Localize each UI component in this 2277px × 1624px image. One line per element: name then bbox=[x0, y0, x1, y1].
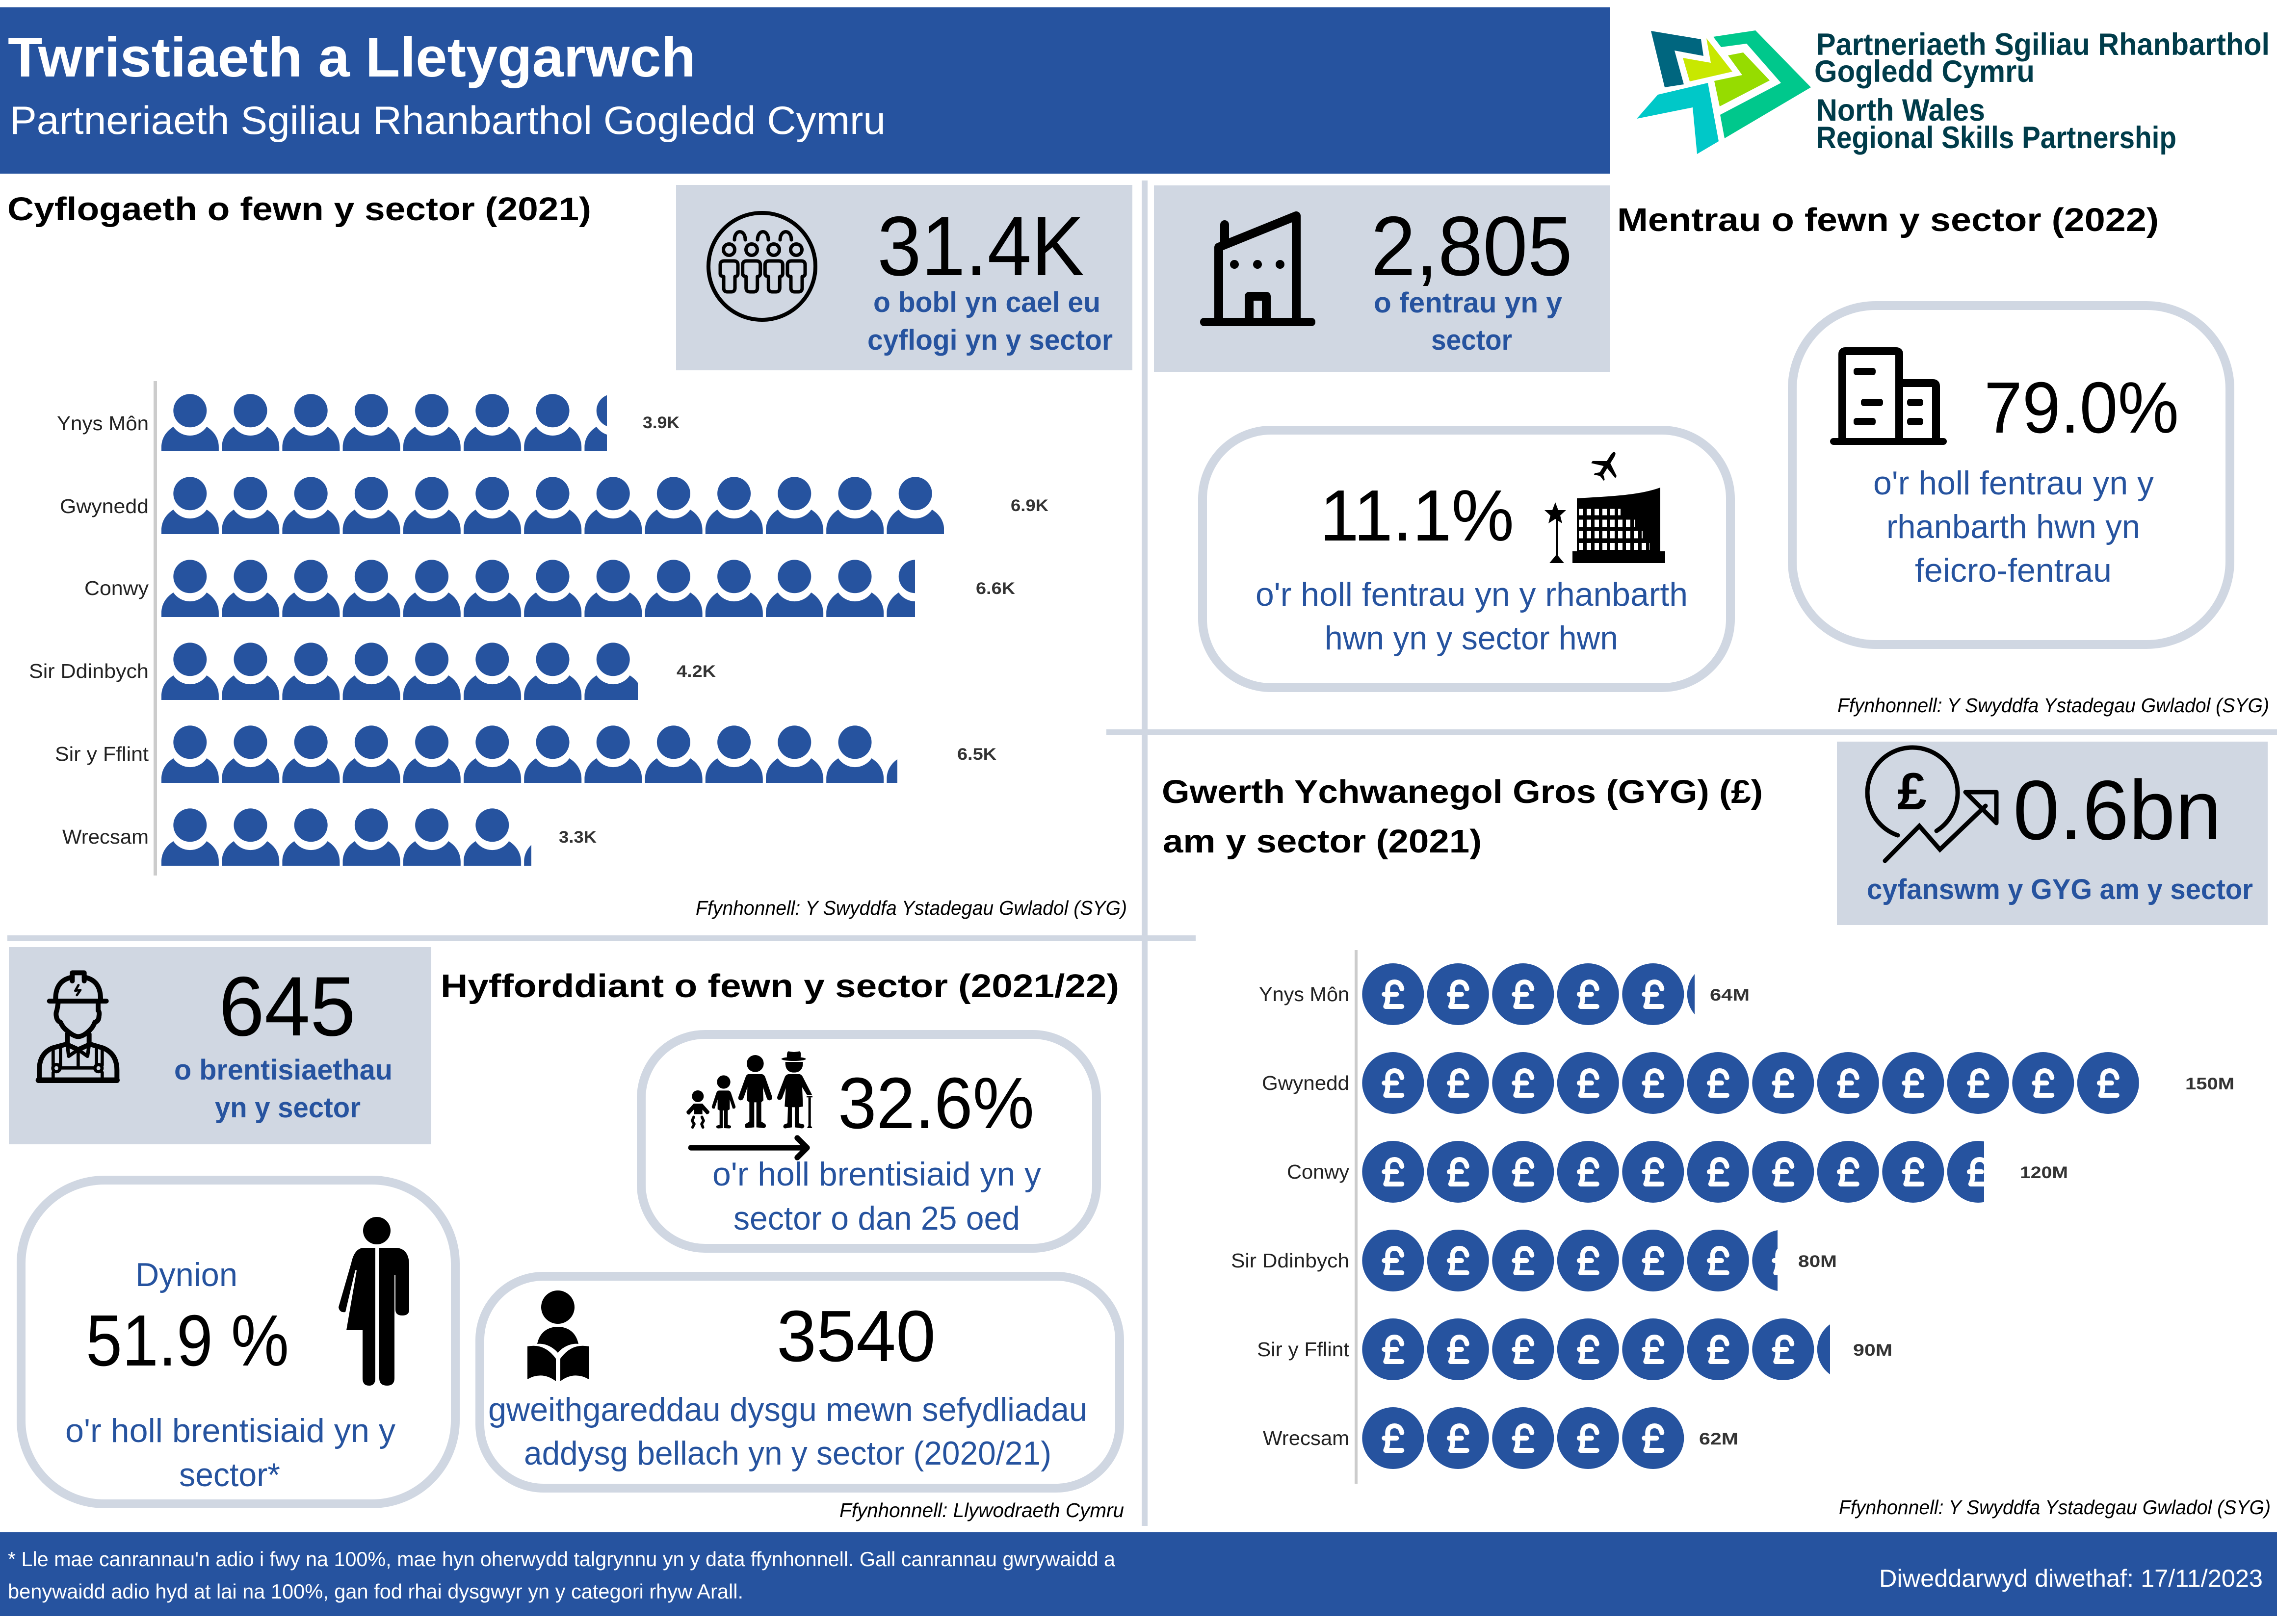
row: Gwynedd bbox=[1262, 1052, 2234, 1114]
figure: 32.6%: 32.6% bbox=[838, 1063, 1034, 1144]
icon: hotel with palm and plane bbox=[1544, 445, 1665, 563]
icon: male and female figure bbox=[339, 1217, 409, 1386]
icon: pound coin with rising arrow bbox=[1867, 748, 1996, 861]
row: Sir y Fflint: Sir y Fflint bbox=[55, 743, 149, 765]
row: Conwy: 120M bbox=[2020, 1163, 2068, 1182]
subtitle: Partneriaeth Sgiliau Rhanbarthol Gogledd Cymru bbox=[10, 99, 886, 143]
caption bbox=[1256, 576, 1688, 657]
row: Sir Ddinbych: Sir Ddinbych bbox=[29, 660, 149, 682]
panel: 32.6% under 25 bbox=[641, 1034, 1097, 1248]
row: Wrecsam: 3.3K bbox=[559, 828, 597, 847]
icon: group of people in circle bbox=[708, 213, 815, 320]
caption: cyfanswm y GYG am y sector bbox=[1867, 874, 2253, 905]
figure: 3540: 3540 bbox=[777, 1296, 936, 1377]
source: employment: Ffynhonnell: Y Swyddfa Ystadegau Gwladol (SYG) bbox=[696, 897, 1127, 919]
last updated: Diweddarwyd diwethaf: 17/11/2023 bbox=[1879, 1565, 2263, 1592]
caption: hwn yn y sector hwn bbox=[1325, 619, 1618, 657]
caption: o'r holl brentisiaid yn y bbox=[712, 1156, 1041, 1193]
row: Wrecsam: 62M bbox=[1699, 1430, 1738, 1448]
row: Sir Ddinbych bbox=[29, 636, 716, 701]
row: Wrecsam bbox=[1263, 1407, 1738, 1469]
panel: 51.9% men bbox=[21, 1180, 455, 1504]
row: Ynys Môn: Ynys Môn bbox=[57, 412, 149, 435]
icon: family ages with arrow bbox=[686, 1051, 812, 1158]
heading: training: Hyfforddiant o fewn y sector (2021/22) bbox=[441, 968, 1119, 1005]
chart: GVA by county pictogram bbox=[1231, 950, 2234, 1484]
heading: GVA: am y sector (2021) bbox=[1163, 823, 1482, 860]
caption bbox=[867, 286, 1113, 356]
footer band bbox=[0, 1532, 2277, 1616]
figure: 0.6bn: 0.6bn bbox=[2013, 763, 2222, 857]
caption bbox=[1873, 464, 2154, 589]
row: Sir y Fflint bbox=[55, 719, 996, 784]
footnote: * Lle mae canrannau'n adio i fwy na 100%, mae hyn oherwydd talgrynnu yn y data ffynhonnell. Gall canrannau gwrywaidd a bbox=[8, 1547, 1116, 1571]
row: Sir y Fflint: 90M bbox=[1853, 1341, 1892, 1360]
panel: 3540 learning activities bbox=[480, 1276, 1120, 1488]
figure: 645: 645 bbox=[219, 959, 356, 1054]
row: Ynys Môn: Ynys Môn bbox=[1259, 983, 1349, 1005]
caption: o bobl yn cael eu bbox=[873, 286, 1100, 318]
caption: gweithgareddau dysgu mewn sefydliadau bbox=[488, 1391, 1087, 1428]
row: Ynys Môn: 64M bbox=[1710, 986, 1750, 1005]
icon: building bbox=[1200, 216, 1315, 326]
caption bbox=[65, 1412, 395, 1494]
figure: 79.0%: 79.0% bbox=[1984, 367, 2179, 448]
row: Ynys Môn: 3.9K bbox=[643, 413, 680, 432]
row: Conwy bbox=[1287, 1141, 2068, 1203]
footnote: benywaidd adio hyd at lai na 100%, gan fod rhai dysgwyr yn y categori rhyw Arall. bbox=[8, 1580, 743, 1603]
source: enterprises: Ffynhonnell: Y Swyddfa Ystadegau Gwladol (SYG) bbox=[1837, 694, 2269, 717]
row: Conwy: 6.6K bbox=[976, 579, 1015, 598]
logo: North Wales Regional Skills Partnership: Regional Skills Partnership bbox=[1816, 121, 2176, 155]
row: Gwynedd bbox=[60, 470, 1048, 535]
caption bbox=[174, 1054, 393, 1124]
caption: addysg bellach yn y sector (2020/21) bbox=[524, 1435, 1051, 1472]
footnote bbox=[8, 1547, 1116, 1603]
caption: feicro-fentrau bbox=[1915, 552, 2112, 589]
panel: employment total bbox=[676, 185, 1132, 370]
icon: pound coin with rising arrow: £ bbox=[1897, 762, 1927, 821]
caption: o brentisiaethau bbox=[174, 1054, 393, 1086]
caption: cyflogi yn y sector bbox=[867, 324, 1113, 356]
row: Ynys Môn bbox=[1259, 963, 1750, 1026]
row: Conwy bbox=[84, 553, 1015, 618]
row: Ynys Môn bbox=[57, 387, 680, 452]
row: Sir Ddinbych: 4.2K bbox=[677, 662, 716, 681]
logo: North Wales Regional Skills Partnership: Gogledd Cymru bbox=[1814, 54, 2035, 89]
row: Sir Ddinbych: 80M bbox=[1798, 1252, 1837, 1271]
figure: 51.9 %: 51.9 % bbox=[86, 1300, 289, 1381]
icon: worker with hard hat bbox=[38, 973, 117, 1080]
caption: rhanbarth hwn yn bbox=[1886, 508, 2140, 545]
chart: employment by county pictogram bbox=[29, 381, 1048, 876]
header banner bbox=[0, 7, 1610, 174]
caption: o'r holl fentrau yn y rhanbarth bbox=[1256, 576, 1688, 613]
row: Gwynedd: 150M bbox=[2185, 1075, 2234, 1093]
row: Sir y Fflint bbox=[1257, 1318, 1892, 1381]
caption bbox=[1374, 287, 1562, 356]
row: Wrecsam: Wrecsam bbox=[62, 825, 149, 848]
icon: person reading book bbox=[527, 1290, 589, 1381]
row: Sir Ddinbych bbox=[1231, 1230, 1837, 1292]
heading: GVA: Gwerth Ychwanegol Gros (GYG) (£) bbox=[1162, 773, 1763, 810]
heading: enterprises: Mentrau o fewn y sector (2022) bbox=[1617, 202, 2159, 238]
row: Wrecsam bbox=[62, 802, 597, 867]
row: Gwynedd: Gwynedd bbox=[60, 495, 149, 517]
heading: GVA bbox=[1162, 773, 1763, 860]
caption: sector* bbox=[179, 1456, 280, 1494]
caption: yn y sector bbox=[215, 1092, 361, 1124]
row: Conwy: Conwy bbox=[84, 577, 149, 599]
row: Sir y Fflint: Sir y Fflint bbox=[1257, 1338, 1350, 1361]
caption: o'r holl fentrau yn y bbox=[1873, 464, 2154, 502]
figure: 31.4K: 31.4K bbox=[877, 199, 1084, 293]
source: training: Ffynhonnell: Llywodraeth Cymru bbox=[839, 1499, 1124, 1521]
label: Dynion: Dynion bbox=[135, 1256, 237, 1293]
panel: 79.0% micro-enterprises bbox=[1792, 306, 2230, 644]
logo: North Wales Regional Skills Partnership bbox=[1637, 27, 2270, 155]
row: Wrecsam: Wrecsam bbox=[1263, 1427, 1349, 1449]
panel: apprenticeships total bbox=[9, 947, 431, 1144]
figure: 11.1%: 11.1% bbox=[1320, 475, 1514, 556]
panel: enterprises total bbox=[1154, 185, 1610, 372]
panel: GVA total bbox=[1837, 742, 2268, 925]
icon: office blocks bbox=[1830, 351, 1947, 445]
panel: 11.1% of enterprises bbox=[1203, 430, 1730, 688]
caption: o fentrau yn y bbox=[1374, 287, 1562, 319]
title: Twristiaeth a Lletygarwch bbox=[8, 26, 696, 89]
row: Gwynedd: 6.9K bbox=[1011, 496, 1048, 515]
logo: North Wales Regional Skills Partnership: North Wales bbox=[1816, 93, 1985, 128]
caption bbox=[488, 1391, 1087, 1472]
row: Conwy: Conwy bbox=[1287, 1160, 1350, 1183]
caption: sector bbox=[1431, 324, 1512, 356]
figure: 2,805: 2,805 bbox=[1371, 199, 1572, 293]
row: Sir Ddinbych: Sir Ddinbych bbox=[1231, 1249, 1349, 1272]
panel: employment heading: Cyflogaeth o fewn y sector (2021) bbox=[7, 191, 591, 228]
caption: o'r holl brentisiaid yn y bbox=[65, 1412, 395, 1449]
row: Gwynedd: Gwynedd bbox=[1262, 1072, 1349, 1094]
row: Sir y Fflint: 6.5K bbox=[957, 745, 996, 764]
caption bbox=[712, 1156, 1041, 1237]
caption: sector o dan 25 oed bbox=[733, 1200, 1020, 1237]
